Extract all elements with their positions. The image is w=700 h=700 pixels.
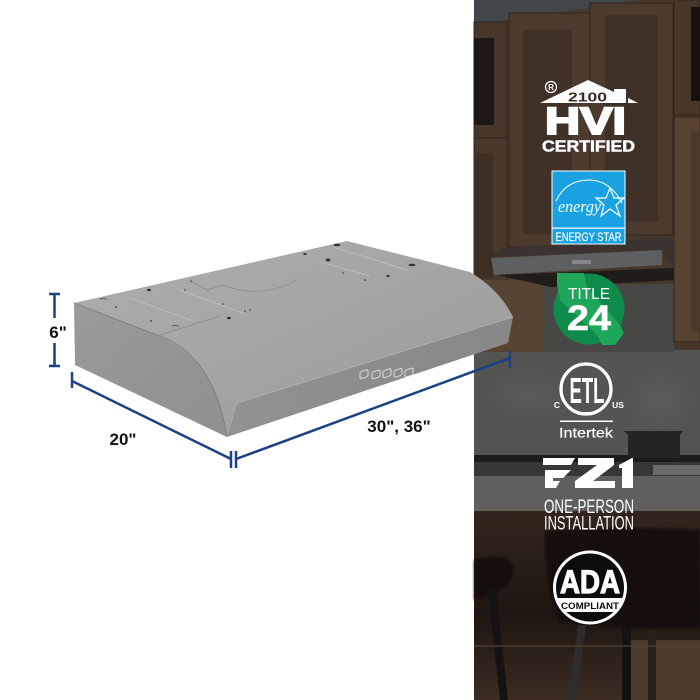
dimension: depth 20 inches: 20" (110, 430, 136, 449)
icon: HVI certified badge: HVI (545, 101, 626, 143)
dimension: depth 20 inches (72, 372, 231, 468)
icon: ETL listed Intertek mark: Intertek (559, 424, 614, 440)
dimension: width 30, 36 inches (236, 351, 510, 468)
icon: Energy Star badge: ENERGY STAR (556, 230, 622, 244)
dimension: width 30, 36 inches: 30", 36" (367, 417, 431, 436)
icon: Title 24 California badge (554, 273, 624, 345)
control buttons (360, 368, 413, 379)
icon: EZ1 one-person installation: INSTALLATION (544, 514, 634, 534)
icon: Title 24 California badge: 24 (567, 299, 612, 338)
icon: HVI certified badge: 2100 (568, 90, 607, 104)
icon: Energy Star badge (552, 171, 625, 244)
icon: ETL listed Intertek mark (554, 364, 624, 440)
hood top surface (74, 241, 513, 437)
icon: HVI certified badge: R (548, 83, 554, 92)
icon: ADA compliant badge: COMPLIANT (561, 601, 619, 612)
icon: ETL listed Intertek mark: US (612, 400, 624, 410)
lower cabinets and stools (474, 511, 700, 700)
icon: Energy Star badge: energy (558, 197, 601, 216)
icon: ETL listed Intertek mark: LISTED (578, 411, 595, 416)
icon: ADA compliant badge: ADA (560, 564, 620, 600)
dimension: height 6 inches (49, 294, 67, 366)
icon: EZ1 one-person installation (543, 458, 634, 534)
cooktop and pot (474, 431, 700, 511)
backsplash stone (474, 350, 700, 456)
cabinet doors (474, 0, 700, 283)
icon: HVI certified badge: CERTIFIED (542, 138, 635, 156)
hood side panel (74, 303, 227, 437)
icon: HVI certified badge (540, 80, 638, 156)
panel: kitchen photo background (474, 0, 700, 700)
background range hood (491, 237, 674, 287)
product: under-cabinet range hood (74, 241, 513, 437)
icon: Title 24 California badge: TITLE (568, 286, 610, 303)
mounting plate details (160, 280, 297, 335)
icon: ETL listed Intertek mark: ETL (570, 370, 604, 411)
hood front panel (227, 317, 513, 437)
icon: EZ1 one-person installation: ONE-PERSON (544, 497, 634, 518)
icon: ETL listed Intertek mark: C (554, 400, 560, 410)
icon: ADA compliant badge (550, 550, 630, 624)
dimension: height 6 inches: 6" (49, 323, 67, 342)
